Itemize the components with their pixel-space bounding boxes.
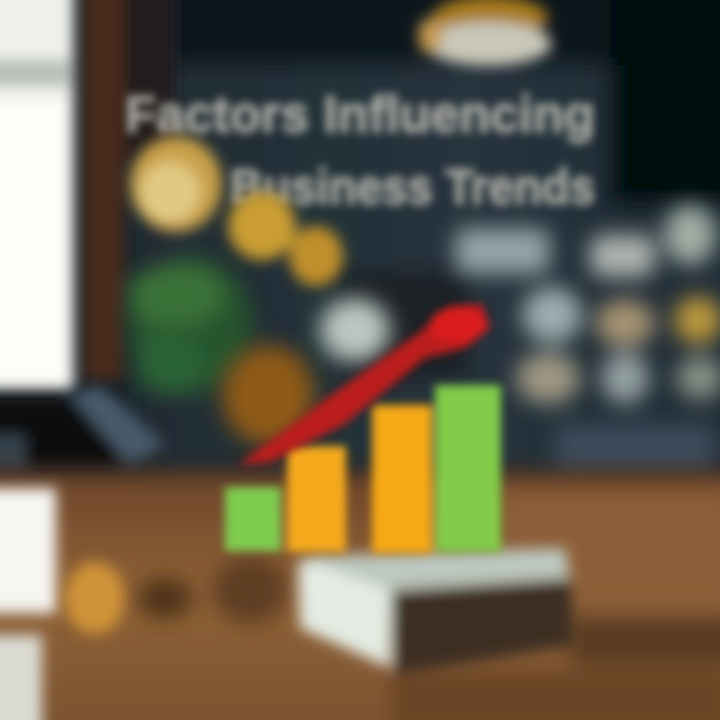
icon: gold coin [65, 562, 125, 634]
bar: small green [225, 487, 281, 551]
chalkboard panel [120, 0, 720, 470]
wooden table [0, 472, 720, 720]
wooden column [84, 0, 174, 380]
bar: tall orange [372, 405, 432, 553]
window [0, 0, 74, 390]
table white reflection [0, 488, 56, 720]
icon: coin stacks [137, 556, 288, 624]
bar: tallest green [435, 385, 501, 552]
bar chart [225, 385, 501, 553]
coins on table [65, 556, 288, 634]
headline text: Factors Influencing [125, 86, 595, 144]
glass jar with coins [222, 345, 314, 445]
headline text [125, 86, 595, 215]
bar: small orange [287, 446, 346, 552]
arrow: red rising trend [238, 304, 490, 465]
headline text: Business Trends [230, 159, 595, 215]
right shelf items [320, 205, 720, 470]
plant [127, 257, 252, 395]
dark foreground shapes left [0, 385, 165, 470]
hanging lamps [130, 0, 552, 286]
pedestal box [296, 548, 575, 675]
